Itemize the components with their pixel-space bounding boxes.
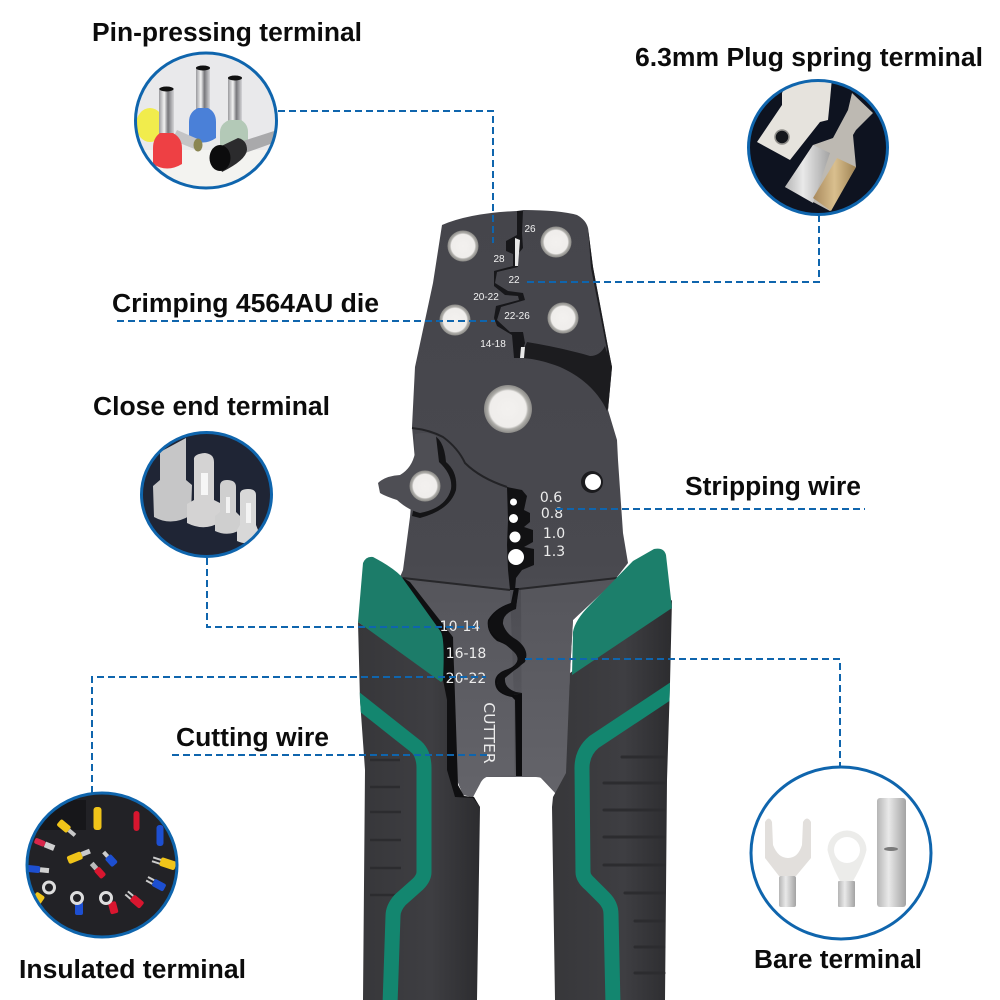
left handle shadow [400, 576, 480, 807]
crimp die highlights [515, 238, 525, 358]
ring [27, 793, 177, 937]
heading: 6.3mm plug spring terminal: 6.3mm Plug spring terminal [635, 44, 983, 72]
ring [136, 53, 276, 188]
crimping die channel [494, 211, 525, 358]
right teal stripe [582, 685, 680, 1000]
jaw gap between upper and lower jaw [520, 342, 611, 411]
tool: wire crimping pliers [352, 210, 680, 1000]
ring [748, 80, 888, 214]
leader: pin-pressing [278, 111, 493, 243]
ring terminal [828, 830, 866, 881]
icon: close end terminals [138, 430, 274, 560]
heading: stripping wire: Stripping wire [685, 473, 861, 501]
stripping size labels: 1.3 [543, 544, 565, 560]
lever plate [378, 433, 451, 513]
heading: close end terminal: Close end terminal [93, 393, 330, 421]
leader: insulated [92, 677, 486, 793]
lever shadow [412, 434, 456, 518]
edge shading on jaw [588, 228, 612, 410]
cutter label: CUTTER [480, 702, 498, 764]
head lower seam [412, 428, 507, 487]
right handle [552, 549, 680, 1000]
heading: bare terminal: Bare terminal [754, 946, 922, 974]
cutter blade channel [488, 588, 525, 776]
icon: bare terminals [751, 767, 931, 939]
fork terminal [765, 818, 811, 876]
rivets [410, 226, 578, 502]
butt splice [877, 798, 906, 907]
left grip ridges [370, 760, 401, 895]
ring [142, 432, 272, 556]
heading: crimping die: Crimping 4564AU die [112, 290, 379, 318]
right grip body [552, 600, 672, 1000]
stripping size labels: 1.0 [543, 526, 565, 542]
stripper lever [378, 433, 456, 518]
crimp size labels [440, 619, 486, 687]
heading: pin-pressing terminal: Pin-pressing terminal [92, 19, 362, 47]
die size labels: 22 [508, 275, 520, 286]
leader: crimping die [117, 320, 495, 322]
die size labels: 26 [524, 224, 536, 235]
icon: pin-pressing terminals [130, 50, 280, 190]
die size labels [473, 224, 536, 350]
stripping holes [508, 498, 524, 565]
die size labels: 20-22 [473, 292, 499, 303]
right grip ridges [604, 757, 664, 973]
leader: bare [525, 659, 840, 766]
crimp size labels: 16-18 [446, 646, 486, 662]
die size labels: 22-26 [504, 311, 530, 322]
crimp size labels: 10-14 [440, 619, 480, 635]
leader: cutting [172, 754, 490, 756]
icon: insulated terminals [24, 790, 180, 940]
left grip body [358, 622, 480, 1000]
pivot hole [581, 471, 603, 493]
stripping size labels: 0.8 [541, 506, 563, 522]
leader lines [92, 111, 865, 793]
leader: stripping [556, 508, 865, 510]
heading: insulated terminal: Insulated terminal [19, 956, 246, 984]
left handle [352, 557, 480, 1000]
crimp size labels: 20-22 [446, 671, 486, 687]
stripping size labels: 0.6 [540, 490, 562, 506]
lower metal plate [403, 579, 617, 797]
icon: 6.3mm plug spring terminal [745, 78, 890, 218]
left teal stripe [352, 696, 424, 1000]
pliers metal body [400, 210, 628, 797]
die size labels: 14-18 [480, 339, 506, 350]
die size labels: 28 [493, 254, 505, 265]
stripping notches [507, 487, 534, 590]
plate seam lines [403, 578, 617, 590]
heading: cutting wire: Cutting wire [176, 724, 329, 752]
right teal cap [572, 549, 672, 675]
stripping size labels [540, 490, 565, 560]
left teal cap [358, 557, 444, 682]
cutter blade lighter edge [489, 590, 526, 696]
leader: close end [207, 558, 480, 627]
leader: 6.3mm plug [527, 215, 819, 282]
ring [751, 767, 931, 939]
